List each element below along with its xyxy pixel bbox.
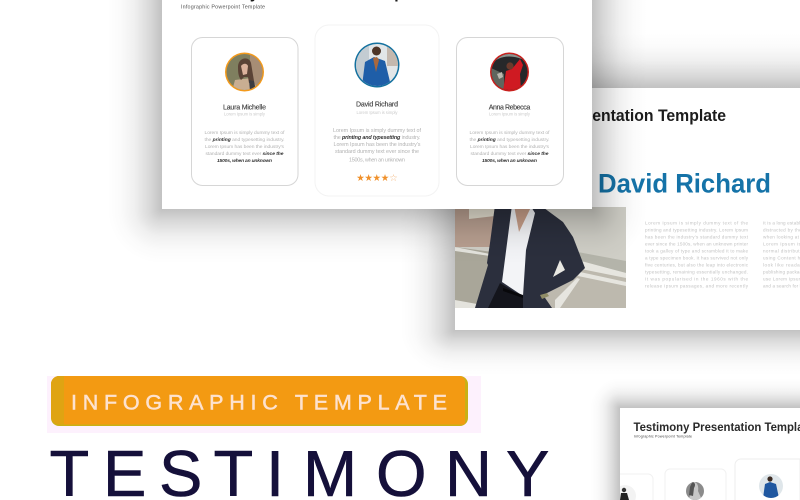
name: Anna Rebecca: Anna Rebecca (489, 104, 530, 112)
avatar: Anna Rebecca (490, 52, 529, 92)
name: Laura Michelle: Laura Michelle (223, 104, 266, 112)
card: Laura Michelle (192, 38, 298, 186)
card: lower-right featured (735, 459, 800, 500)
panel: lower-right slide preview (620, 422, 800, 500)
text column 1: a type specimen book. It has survived not only (645, 256, 749, 260)
card: lower-right middle (665, 469, 726, 500)
quote: Anna Rebecca (470, 130, 550, 164)
slide title: detail slide: Testimony Presentation Template (476, 106, 726, 125)
star rating: ★ (364, 173, 373, 184)
slide subtitle: Infographic Powerpoint Template (181, 5, 265, 11)
text column 1: has been the industry's standard dummy text (645, 234, 749, 240)
star rating: ★ (356, 173, 365, 184)
badge: Infographic Template: INFOGRAPHIC TEMPLATE (71, 390, 447, 414)
quote: Laura Michelle (204, 130, 285, 164)
avatar: Laura Michelle (225, 52, 264, 92)
text column 2 (763, 220, 800, 288)
star rating: ★ (373, 173, 381, 184)
avatar: lower-right man in blue (759, 474, 783, 498)
role: David Richard: Lorem Ipsum is simply (356, 110, 398, 115)
quote: Anna Rebecca: the printing and typesetting industry. (470, 137, 550, 143)
card: Anna Rebecca (456, 38, 564, 186)
role: Anna Rebecca: Lorem Ipsum is simply (489, 111, 531, 116)
quote: Laura Michelle: 1500s, when an unknown (217, 158, 272, 164)
text column 1 (645, 220, 749, 288)
text column 1: ever since the 1500s, when an unknown printer (645, 242, 748, 246)
panel: David Richard detail slide (455, 109, 800, 308)
text column 1: Lorem Ipsum is simply dummy text of the (645, 220, 748, 226)
quote: David Richard: 1500s, when an unknown (349, 158, 405, 164)
card: David Richard (featured) (315, 25, 439, 196)
quote: Anna Rebecca: 1500s, when an unknown (482, 158, 537, 164)
quote: Laura Michelle: standard dummy text ever since the (206, 151, 284, 157)
avatar: lower-right man in suit (620, 485, 636, 500)
name: David Richard card: David Richard (356, 102, 398, 108)
panel: three testimonial cards slide (162, 0, 592, 209)
avatar: lower-right gray portrait (686, 482, 704, 500)
star rating: ☆ (389, 173, 398, 184)
quote: David Richard (333, 128, 422, 164)
card: lower-right left (620, 474, 653, 500)
quote: Laura Michelle: Lorem Ipsum is simply dummy text of (204, 130, 285, 136)
quote: David Richard: Lorem Ipsum has been the industry's (334, 142, 421, 148)
quote: Laura Michelle: the printing and typesetting industry. (204, 137, 284, 143)
quote: David Richard: the printing and typesetting industry. (334, 135, 420, 141)
text column 1: five centuries, but also the leap into electronic (645, 262, 749, 268)
quote: Anna Rebecca: Lorem Ipsum is simply dummy text of (470, 130, 550, 136)
quote: Anna Rebecca: Lorem Ipsum has been the industry's (470, 144, 550, 150)
text column 1: took a galley of type and scrambled it to make (645, 248, 748, 254)
quote: David Richard: Lorem Ipsum is simply dummy text of (333, 128, 422, 134)
text column 1: It was popularised in the 1960s with the (645, 276, 748, 282)
slide subtitle: lower-right preview: Infographic Powerpoint Template (634, 434, 692, 438)
text column 1: release Ipsum passages, and more recently (645, 284, 749, 288)
badge: Infographic Template (47, 376, 481, 433)
role: Laura Michelle: Lorem Ipsum is simply (224, 111, 266, 116)
quote: David Richard: standard dummy text ever since the (335, 149, 419, 155)
text column 1: typesetting, remaining essentially unchanged. (645, 270, 748, 274)
name: David Richard: David Richard (598, 168, 771, 198)
photo: man in dark blazer (455, 205, 626, 308)
quote: Anna Rebecca: standard dummy text ever since the (470, 151, 549, 157)
quote: Laura Michelle: Lorem Ipsum has been the industry's (205, 144, 285, 150)
avatar: David Richard (354, 42, 400, 88)
text column 1: printing and typesetting industry. Lorem Ipsum (645, 228, 748, 232)
star rating (356, 173, 398, 184)
star rating: ★ (381, 173, 389, 184)
